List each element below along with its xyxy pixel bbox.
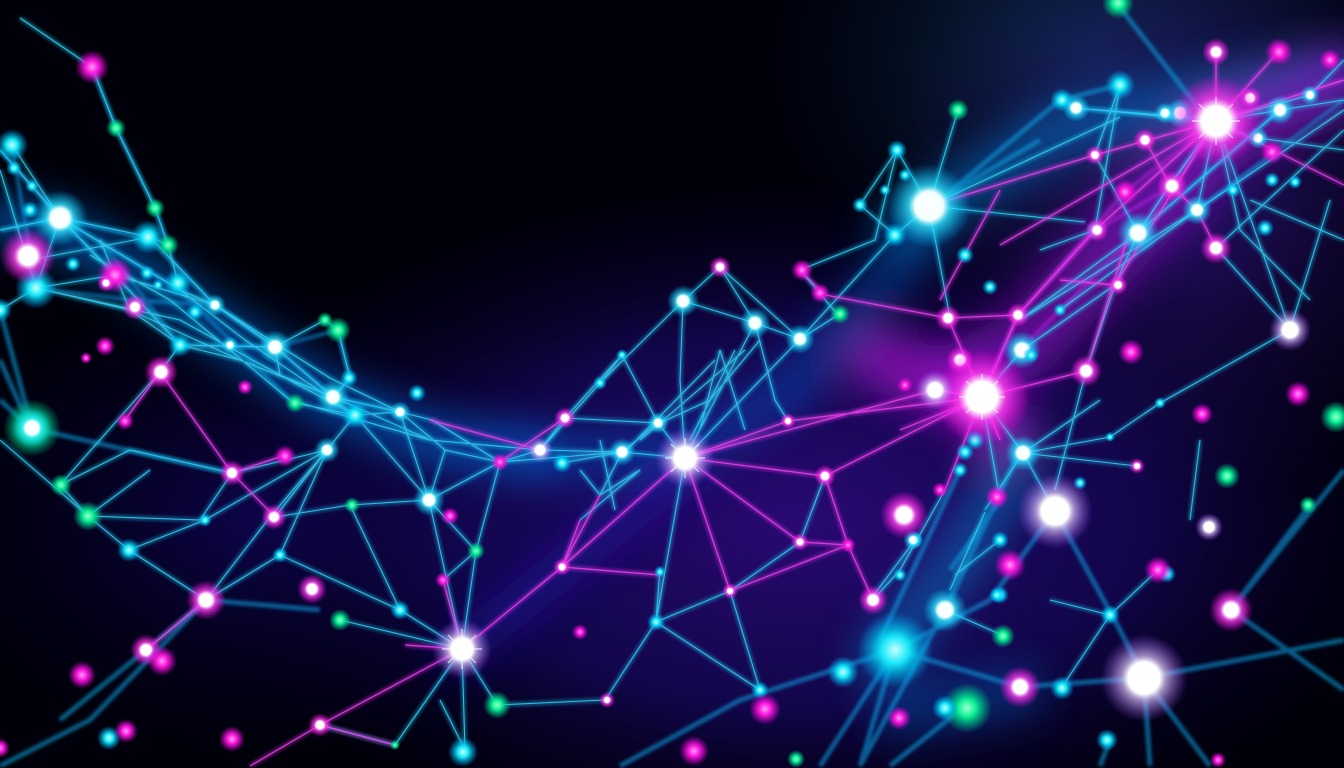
starburst rays around hubs [442,97,1240,669]
network nodes: bright white hubs [432,75,1311,722]
